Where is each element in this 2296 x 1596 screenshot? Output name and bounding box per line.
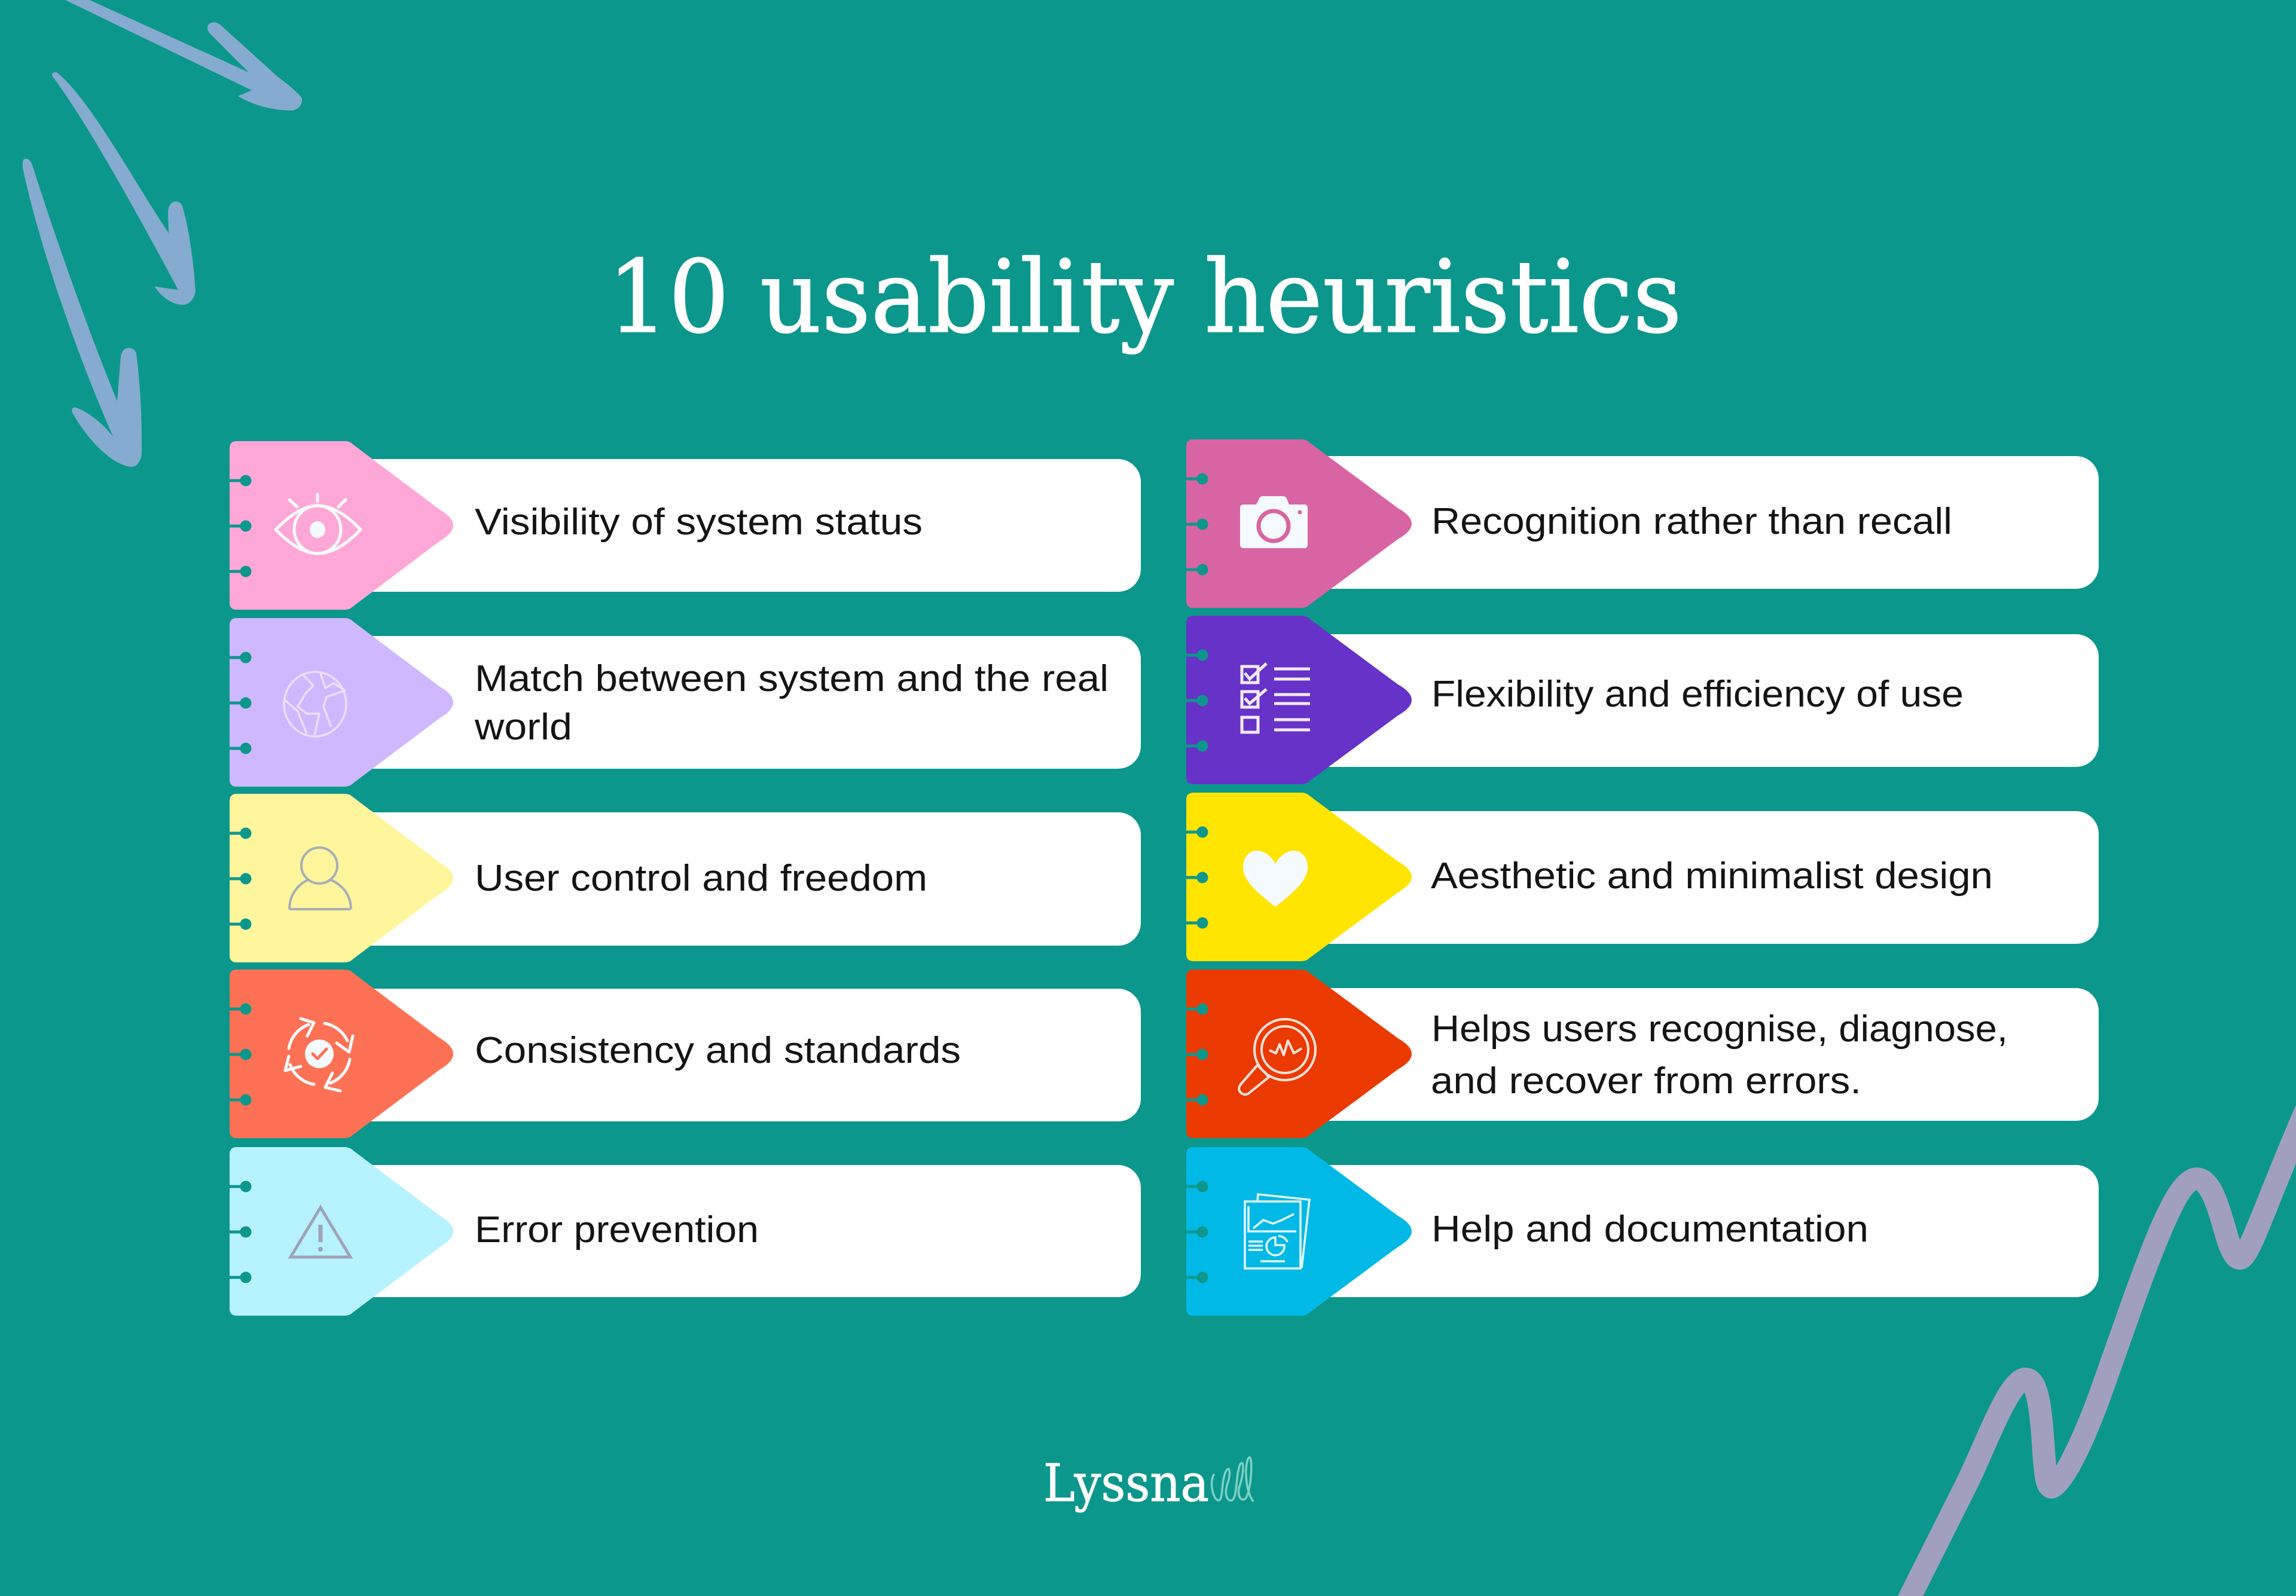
- panel: Helps users recognise, diagnose, and recover from errors: [1186, 970, 2099, 1138]
- label: Aesthetic and minimalist design: [1431, 855, 1993, 897]
- label: Flexibility and efficiency of use: [1431, 674, 1964, 715]
- label: Helps users recognise, diagnose,: [1431, 1008, 2008, 1050]
- tag: [1186, 439, 1412, 608]
- icon: heart: [1243, 851, 1308, 907]
- card: [1256, 811, 2099, 944]
- panel: Consistency and standards: [230, 970, 1141, 1138]
- tag: [1186, 970, 1412, 1138]
- wordmark: Lyssna: [1043, 1454, 1209, 1514]
- tag: [230, 1147, 453, 1316]
- label: world: [474, 707, 572, 748]
- arrow 1: [60, 0, 302, 111]
- label: Error prevention: [475, 1209, 759, 1250]
- tag: [230, 441, 453, 610]
- arrow 2: [52, 72, 196, 305]
- icon: globe: [284, 672, 346, 736]
- card: [299, 812, 1141, 946]
- arrow 3: [23, 159, 142, 467]
- card: [299, 459, 1141, 592]
- tag: [230, 970, 453, 1138]
- panel: Recognition rather than recall: [1186, 439, 2099, 608]
- tag: [1186, 616, 1412, 784]
- panel: Aesthetic and minimalist design: [1186, 793, 2099, 961]
- label: and recover from errors.: [1431, 1060, 1861, 1102]
- scribble mark: [1212, 1457, 1253, 1502]
- label: Match between system and the real: [475, 658, 1109, 699]
- card: [1256, 1165, 2099, 1297]
- decorative arrows top left: [23, 0, 302, 467]
- card: [299, 1165, 1141, 1297]
- panel: User control and freedom: [230, 794, 1141, 962]
- tag: [1186, 793, 1412, 961]
- tag: [230, 794, 453, 962]
- icon: warning triangle: [291, 1207, 350, 1257]
- icon: eye: [276, 494, 361, 554]
- card: [1256, 988, 2099, 1121]
- panel: Match between system and the real world: [230, 618, 1141, 787]
- label: [1431, 1008, 2008, 1102]
- icon: magnifier: [1239, 1019, 1315, 1094]
- title: 10 usability heuristics: [607, 239, 1682, 356]
- label: Help and documentation: [1431, 1209, 1868, 1250]
- label: Visibility of system status: [475, 502, 923, 543]
- card: [299, 636, 1141, 769]
- icon: cycle check: [285, 1019, 353, 1091]
- panel: Flexibility and efficiency of use: [1186, 616, 2099, 784]
- card: [1256, 456, 2099, 589]
- decorative squiggle bottom right: [1901, 1106, 2296, 1596]
- icon: camera: [1240, 496, 1308, 548]
- logo: Lyssna: [1043, 1454, 1253, 1514]
- label: Recognition rather than recall: [1431, 501, 1952, 542]
- panel: Visibility of system status: [230, 441, 1141, 610]
- card: [299, 989, 1141, 1121]
- panel: Help and documentation: [1186, 1147, 2099, 1316]
- icon: person: [289, 848, 351, 909]
- label: Consistency and standards: [475, 1030, 961, 1071]
- panel: Error prevention: [230, 1147, 1141, 1316]
- icon: documents: [1245, 1194, 1309, 1268]
- label: [474, 658, 1109, 748]
- tag: [1186, 1147, 1412, 1316]
- card: [1256, 634, 2099, 767]
- icon: checklist: [1242, 664, 1310, 732]
- tag: [230, 618, 453, 787]
- label: User control and freedom: [475, 858, 927, 899]
